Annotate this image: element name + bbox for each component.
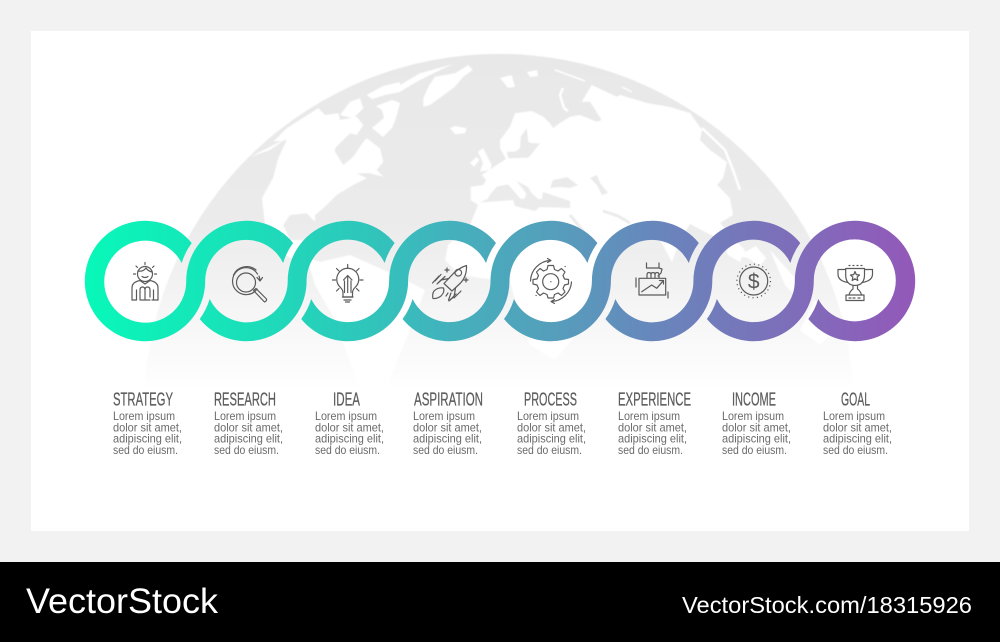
label: idea: adipiscing elit, [315,432,384,446]
label: aspiration: Lorem ipsum [413,409,475,423]
label: goal: sed do eiusm. [823,443,888,457]
label: idea: Lorem ipsum [315,409,377,423]
label: strategy: adipiscing elit, [113,432,182,446]
label: experience [618,390,691,457]
label: aspiration: ASPIRATION [414,390,483,410]
label: experience: sed do eiusm. [618,443,683,457]
label: strategy: sed do eiusm. [113,443,178,457]
label: process: adipiscing elit, [517,432,586,446]
world globe background [144,54,854,392]
label: idea: dolor sit amet, [315,420,384,434]
icon: dollar coin [737,264,770,298]
icon: gear with arrows [530,258,572,304]
label: research: Lorem ipsum [214,409,276,423]
icon: hand holding chart [636,263,668,298]
label: research: RESEARCH [214,390,276,410]
label: experience: Lorem ipsum [618,409,680,423]
label: research [214,390,283,457]
label: aspiration [413,390,483,457]
label: experience: dolor sit amet, [618,420,687,434]
label: experience: adipiscing elit, [618,432,687,446]
label: income: adipiscing elit, [722,432,791,446]
label: strategy: Lorem ipsum [113,409,175,423]
ring band: idea to aspiration [301,221,496,341]
label: process [517,390,586,457]
label: experience: EXPERIENCE [618,390,691,410]
chain of eight linked rings [85,221,915,341]
white card panel [31,31,969,531]
icon: trophy with star [838,266,872,300]
icon: magnifier [233,267,267,302]
label: aspiration: adipiscing elit, [413,432,482,446]
label: income: INCOME [732,390,776,410]
label: goal: GOAL [841,390,870,410]
ring band: process to experience [504,221,699,341]
label: research: sed do eiusm. [214,443,279,457]
label: idea: sed do eiusm. [315,443,380,457]
label: income: dolor sit amet, [722,420,791,434]
ring band: experience to income [605,221,800,341]
label: process: PROCESS [524,390,577,410]
label: income: sed do eiusm. [722,443,787,457]
icon: dollar coin: $ [748,270,760,294]
icon: light bulb [332,264,363,302]
footer brand: VectorStock [26,582,219,621]
label: goal: Lorem ipsum [823,409,885,423]
ring band: aspiration to process [403,221,597,341]
label: income [722,390,791,457]
footer url: VectorStock.com/18315926 [682,592,972,618]
label: process: dolor sit amet, [517,420,586,434]
label: idea: IDEA [333,390,360,410]
icon: person [132,262,158,300]
label: research: adipiscing elit, [214,432,283,446]
label: aspiration: sed do eiusm. [413,443,478,457]
ring band: income to goal [707,221,915,341]
label: income: Lorem ipsum [722,409,784,423]
footer bar [0,562,1000,642]
label: idea [315,390,384,457]
icon: rocket [432,266,468,301]
label: strategy: dolor sit amet, [113,420,182,434]
label: research: dolor sit amet, [214,420,283,434]
label: strategy [113,390,182,457]
label: goal: adipiscing elit, [823,432,892,446]
label: goal [823,390,892,457]
label: process: sed do eiusm. [517,443,582,457]
ring band: research to idea [200,221,395,341]
label: process: Lorem ipsum [517,409,579,423]
label: strategy: STRATEGY [113,390,173,410]
ring band: strategy to research [85,221,293,341]
label: goal: dolor sit amet, [823,420,892,434]
label: aspiration: dolor sit amet, [413,420,482,434]
